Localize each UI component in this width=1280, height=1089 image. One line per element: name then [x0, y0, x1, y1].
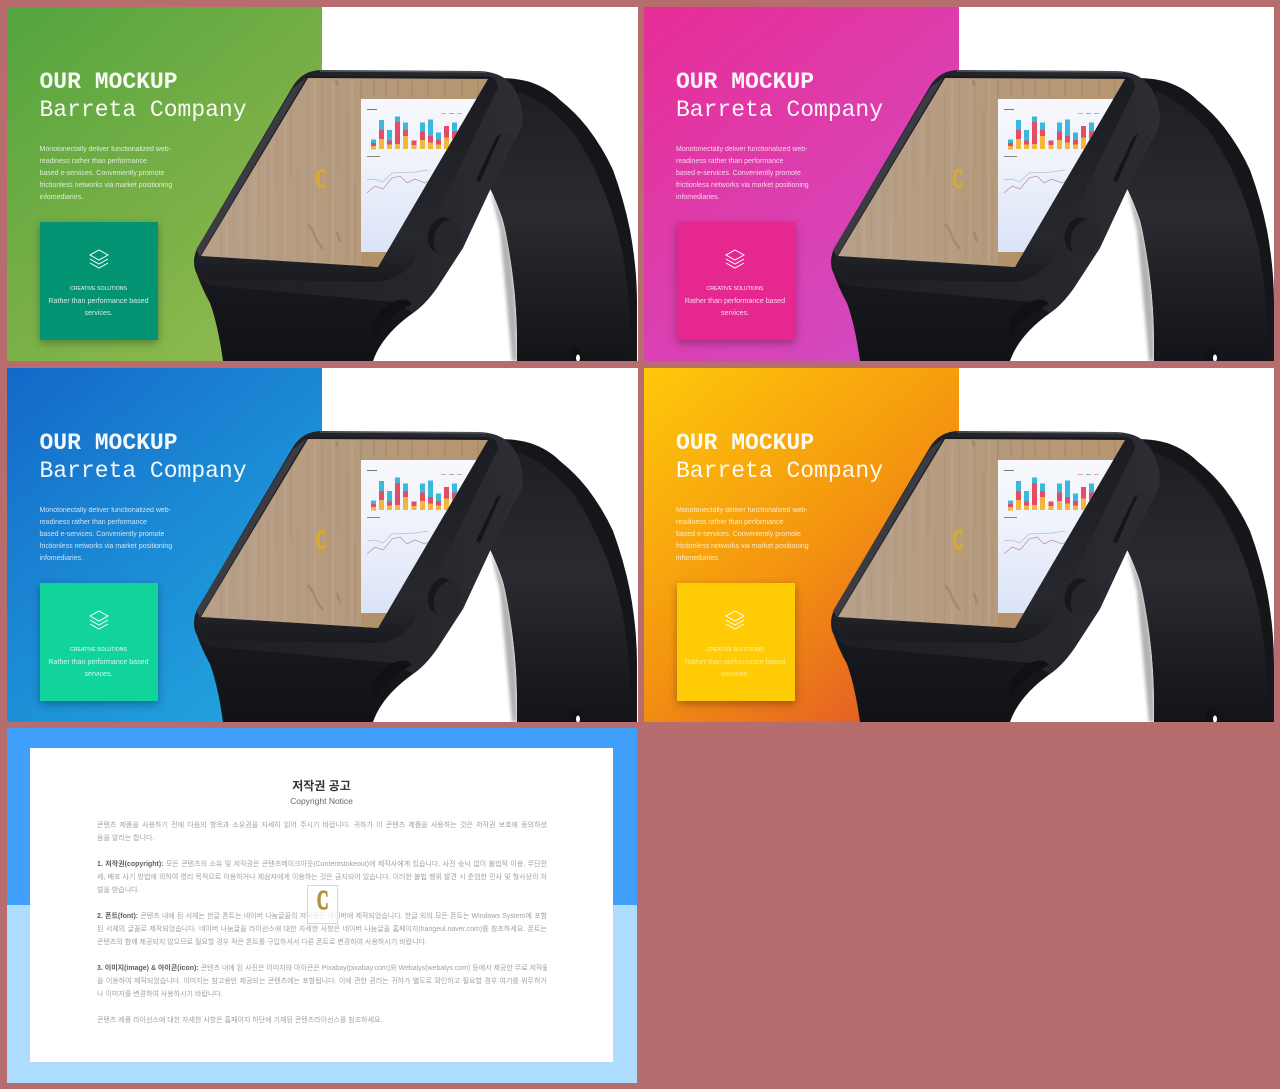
- panel: copyright notice: [7, 728, 637, 1083]
- panel: pink mockup: [644, 7, 1274, 361]
- body text: Monotonectally deliver functionalized web-: [40, 507, 171, 514]
- body text: based e-services. Conveniently promote: [40, 170, 164, 177]
- body text: frictionless networks via market positioning: [40, 182, 172, 189]
- intro text: [97, 821, 547, 842]
- body text: readiness rather than performance: [676, 519, 783, 526]
- card text: Rather than performance based: [685, 658, 785, 666]
- card text: services.: [721, 309, 749, 317]
- body text: frictionless networks via market positioning: [40, 543, 172, 550]
- section 2 font: [97, 912, 547, 946]
- card text: [685, 297, 785, 317]
- watch mockup: C: [952, 163, 963, 193]
- section 3 image and icon: [97, 964, 547, 998]
- heading: Barreta Company: [40, 458, 247, 484]
- section 3 image and icon: 나 이미지를 변경하여 사용하시기 바랍니다.: [97, 991, 223, 998]
- body text: infomediaries.: [676, 555, 720, 562]
- body text: based e-services. Conveniently promote: [40, 531, 164, 538]
- body text: Monotonectally deliver functionalized web-: [40, 146, 171, 153]
- body text: [676, 146, 809, 201]
- card title: CREATIVE SOLUTIONS: [706, 286, 763, 292]
- heading: [40, 430, 247, 484]
- green gradient background: [7, 7, 322, 361]
- feature card: [40, 583, 158, 701]
- body text: frictionless networks via market positioning: [676, 543, 809, 550]
- panel: orange mockup: [644, 368, 1274, 722]
- body text: infomediaries.: [40, 194, 83, 201]
- heading: Barreta Company: [676, 97, 883, 123]
- logo watermark: [307, 885, 338, 924]
- section 1 copyright: 1. 저작권(copyright): 모든 콘텐츠의 소유 및 저작권은 콘텐츠메이크아웃(Contentstokeout)에 제작사에게 있습니다. 사전 승낙 없이 불법적 이용, 무단전: [97, 861, 547, 868]
- heading: Barreta Company: [676, 458, 883, 484]
- icon: layers: [89, 610, 109, 630]
- watch mockup: [831, 431, 1274, 722]
- panel: green mockup: [7, 7, 638, 361]
- section 1 copyright: 세, 배포 사기 방법에 의하여 영리 목적으로 이용하거나 제삼자에게 이용하는 것은 금지되어 있습니다. 이러한 불법 행위 발견 시 준엄한 민사 및 형사상의 처: [97, 874, 547, 881]
- section 2 font: 콘텐츠의 함께 제공되지 않으므로 필요할 경우 적은 폰트를 구입하셔서 다른 폰트로 변경하여 사용하시기 바랍니다.: [97, 939, 427, 946]
- body text: Monotonectally deliver functionalized web-: [676, 146, 808, 153]
- section 3 image and icon: 을 이용하여 제작되었습니다. 이미지는 참고용만 제공되는 콘텐츠에는 포함됩니다. 이에 관한 권리는 귀하가 별도로 확인하고 필요할 경우 여기를 위두하거: [97, 978, 547, 985]
- section 2 font: 된 서체의 글꼴로 제작되었습니다. 네이버 나눔글꼴 라이선스에 대한 자세한 사항은 네이버 나눔글꼴 홈페이지(hangeul.naver.com)를 참조하세요. 폰트는: [97, 926, 547, 933]
- body text: [40, 146, 172, 201]
- card title: CREATIVE SOLUTIONS: [70, 647, 127, 653]
- body text: readiness rather than performance: [676, 158, 783, 165]
- watch mockup: [194, 431, 637, 722]
- notice subtitle: Copyright Notice: [290, 796, 353, 806]
- icon: layers: [725, 610, 745, 630]
- heading: OUR MOCKUP: [676, 69, 814, 95]
- body text: [40, 507, 172, 562]
- section 1 copyright: [97, 860, 547, 894]
- body text: [676, 507, 809, 562]
- card text: services.: [721, 670, 749, 678]
- body text: infomediaries.: [676, 194, 720, 201]
- intro text: 음을 알리는 합니다.: [97, 835, 154, 842]
- heading: Barreta Company: [40, 97, 247, 123]
- closing note: 콘텐츠 제품 라이선스에 대한 자세한 사항은 홈페이지 하단에 기재된 콘텐츠라이선스를 참조하세요.: [97, 1017, 382, 1024]
- heading: [676, 430, 883, 484]
- icon: layers: [725, 249, 745, 269]
- feature card: [676, 222, 794, 340]
- heading: OUR MOCKUP: [40, 69, 178, 95]
- watch mockup: [194, 70, 637, 361]
- body text: readiness rather than performance: [40, 158, 147, 165]
- icon: layers: [89, 249, 109, 269]
- notice title: 저작권 공고: [292, 779, 351, 793]
- card text: Rather than performance based: [48, 658, 149, 666]
- watch mockup: C: [952, 524, 963, 554]
- card text: Rather than performance based: [48, 297, 149, 305]
- section 2 font: 2. 폰트(font): 콘텐츠 내에 된 서체는 한글 폰트는 네이버 나눔글꼴의 저작권은 네이버에 제작되었습니다. 한글 외의 모든 폰트는 Windows System에 포함: [97, 913, 547, 920]
- white notice sheet: [30, 748, 613, 1062]
- card text: [48, 297, 149, 317]
- heading: [40, 69, 247, 123]
- section 1 copyright: 벌을 받습니다.: [97, 887, 140, 894]
- body text: based e-services. Conveniently promote: [676, 531, 801, 538]
- body text: Monotonectally deliver functionalized web-: [676, 507, 808, 514]
- section 3 image and icon: 3. 이미지(image) & 아이콘(icon): 콘텐츠 내에 된 사진은 이미지와 아이콘은 Pixabay(pixabay.com)와 Webalys(webalys.com) 등에서 제공한 무료 저작물: [97, 965, 547, 972]
- body text: based e-services. Conveniently promote: [676, 170, 801, 177]
- heading: OUR MOCKUP: [40, 430, 178, 456]
- blue gradient background: [7, 368, 322, 722]
- feature card: [40, 222, 158, 340]
- intro text: 콘텐츠 제품을 사용하기 전에 다음의 항목과 소유권을 자세히 읽어 주시기 바랍니다. 귀하가 이 콘텐츠 제품을 사용하는 것은 저작권 보호에 동의하셨: [97, 822, 547, 829]
- heading: OUR MOCKUP: [676, 430, 814, 456]
- body text: frictionless networks via market positioning: [676, 182, 809, 189]
- heading: [676, 69, 883, 123]
- logo watermark: C: [317, 885, 328, 915]
- watch mockup: C: [316, 524, 326, 554]
- body text: readiness rather than performance: [40, 519, 147, 526]
- body text: infomediaries.: [40, 555, 83, 562]
- card text: Rather than performance based: [685, 297, 785, 305]
- card text: [48, 658, 149, 678]
- card title: CREATIVE SOLUTIONS: [706, 647, 763, 653]
- panel: blue mockup: [7, 368, 638, 722]
- card text: [685, 658, 785, 678]
- card text: services.: [84, 309, 112, 317]
- pink gradient background: [644, 7, 958, 361]
- watch mockup: C: [316, 163, 326, 193]
- feature card: [676, 583, 794, 701]
- watch mockup: [831, 70, 1274, 361]
- card text: services.: [84, 670, 112, 678]
- card title: CREATIVE SOLUTIONS: [70, 286, 127, 292]
- orange gradient background: [644, 368, 958, 722]
